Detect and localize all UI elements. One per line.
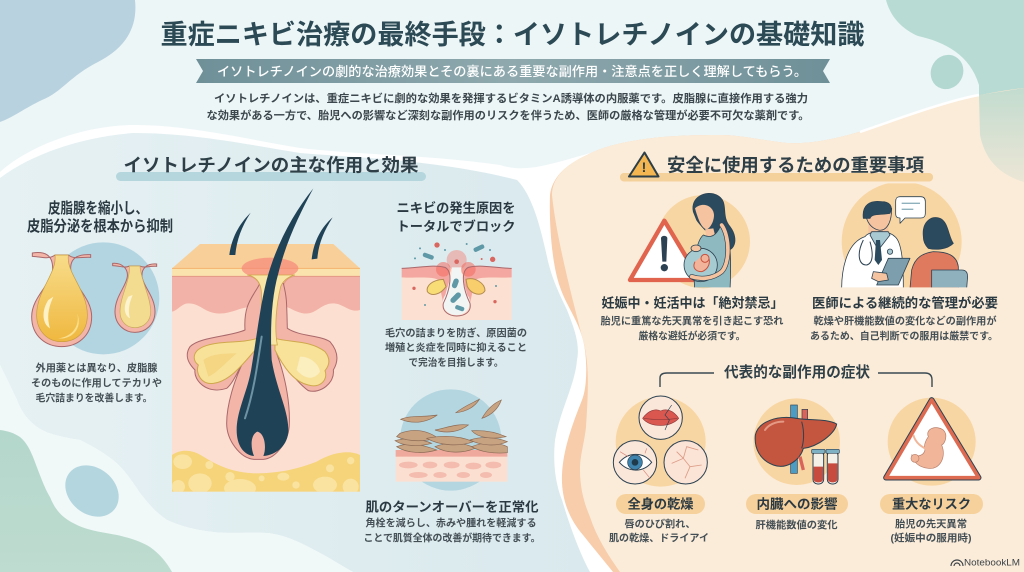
warning mark: ! — [642, 159, 646, 175]
description: 肝機能数値の変化 — [756, 518, 838, 532]
description: 毛穴の詰まりを防ぎ、原因菌の — [385, 326, 527, 340]
intro text: イソトレチノインは、重症ニキビに劇的な効果を発揮するビタミンA誘導体の内服薬です。皮脂腺に直接作用する強力 — [214, 91, 808, 105]
icon: gland comparison — [32, 242, 159, 354]
teal overlap — [979, 88, 1024, 182]
intro text — [206, 91, 810, 122]
label: total block: トータルでブロック — [396, 218, 516, 234]
label: total block — [396, 200, 516, 234]
description: あるため、自己判断での服用は厳禁です。 — [810, 330, 998, 342]
description: 角栓を減らし、赤みや腫れを軽減する — [366, 516, 536, 530]
heading: effects: イソトレチノインの主な作用と効果 — [124, 154, 418, 176]
icon: inflamed pore — [402, 242, 512, 320]
green blob — [0, 430, 172, 572]
panel: sebaceous gland — [27, 199, 173, 404]
description: 乾燥や肝機能数値の変化などの副作用が — [814, 314, 996, 328]
description — [600, 314, 784, 342]
pill: organ impact: 内臓への影響 — [756, 496, 838, 512]
dermis — [172, 275, 360, 314]
icon: doctor and patient — [841, 183, 968, 288]
icon: warning triangle — [629, 152, 658, 176]
panel: acne causes — [385, 200, 527, 369]
panel: pregnancy warning — [600, 193, 784, 342]
pill: whole-body dryness: 全身の乾燥 — [628, 496, 694, 512]
pill: serious risk — [880, 494, 983, 514]
label: total block: ニキビの発生原因を — [396, 200, 516, 216]
description: 肌の乾燥、ドライアイ — [609, 532, 709, 544]
panel: skin turnover — [364, 389, 540, 544]
small hairs — [229, 213, 251, 255]
heading: side effects: 代表的な副作用の症状 — [724, 363, 870, 381]
description — [890, 518, 972, 544]
heading: side effects — [660, 363, 932, 387]
heading: safety — [620, 152, 933, 182]
description: で完治を目指します。 — [408, 356, 504, 369]
skin surface — [172, 244, 360, 268]
description: (妊娠中の服用時) — [890, 532, 972, 544]
pill: whole-body dryness — [616, 494, 705, 514]
pill: serious risk: 重大なリスク — [892, 496, 971, 512]
description: 胎児の先天異常 — [895, 518, 967, 530]
description: 増殖と炎症を同時に抑えること — [385, 341, 527, 354]
top edge highlight — [860, 95, 979, 132]
description — [810, 314, 998, 342]
description: 唇のひび割れ、 — [624, 518, 696, 530]
subtitle ribbon: イソトレチノインの劇的な治療効果とその裏にある重要な副作用・注意点を正しく理解してもらう。 — [217, 64, 807, 79]
description — [385, 326, 527, 369]
description: そのものに作用してテカリや — [31, 376, 162, 390]
label: sebum suppression: 皮脂腺を縮小し、 — [48, 199, 148, 217]
follicle canal — [247, 275, 295, 345]
hair follicle sheath with glands — [187, 283, 337, 459]
description: 厳格な避妊が必須です。 — [638, 330, 746, 342]
panel: serious risk — [880, 398, 983, 544]
icon: liver and test tubes — [753, 398, 840, 485]
description — [609, 518, 709, 544]
icon: skin flakes — [395, 389, 507, 491]
chart: skin cross-section with hair follicle — [172, 188, 360, 498]
icon: embryo warning — [886, 398, 979, 486]
description: 胎児に重篤な先天異常を引き起こす恐れ — [600, 314, 784, 328]
swoosh — [0, 365, 353, 572]
description: 毛穴詰まりを改善します。 — [36, 392, 152, 404]
fat layer — [172, 451, 360, 492]
label: normalize turnover: 肌のターンオーバーを正常化 — [366, 500, 538, 514]
intro text: な効果がある一方で、胎児への影響など深刻な副作用のリスクを伴うため、医師の厳格な管理が必要不可欠な薬剤です。 — [206, 108, 810, 122]
white band beside panels — [0, 125, 640, 572]
description — [364, 516, 540, 544]
hair shaft — [237, 188, 313, 456]
description: ことで肌質全体の改善が期待できます。 — [364, 532, 540, 544]
label: continuous management: 医師による継続的な管理が必要 — [812, 294, 998, 310]
heading text: 安全に使用するための重要事項 — [667, 154, 925, 176]
orange crescents — [550, 88, 1024, 572]
title: 重症ニキビ治療の最終手段：イソトレチノインの基礎知識 — [160, 20, 864, 50]
peach fill — [552, 88, 1024, 572]
panel: right peach background — [550, 88, 1024, 572]
panel: doctor management — [810, 182, 998, 342]
panel: organ impact — [746, 398, 848, 532]
icon: lips eye skin — [613, 396, 707, 487]
panel: left blue — [0, 133, 590, 572]
label: sebum suppression — [27, 199, 173, 235]
oil-filled lobes — [194, 338, 257, 383]
panel: dryness — [609, 396, 709, 544]
label: sebum suppression: 皮脂分泌を根本から抑制 — [27, 217, 173, 235]
watermark: NotebookLM: NotebookLM — [964, 558, 1020, 568]
description: 外用薬とは異なり、皮脂腺 — [36, 362, 158, 374]
label: absolute contraindication: 妊娠中・妊活中は「絶対禁忌」 — [602, 294, 784, 310]
description — [31, 362, 162, 404]
subtitle ribbon — [196, 59, 830, 83]
redness — [242, 258, 298, 279]
icon: pregnant woman with warning — [630, 193, 750, 290]
